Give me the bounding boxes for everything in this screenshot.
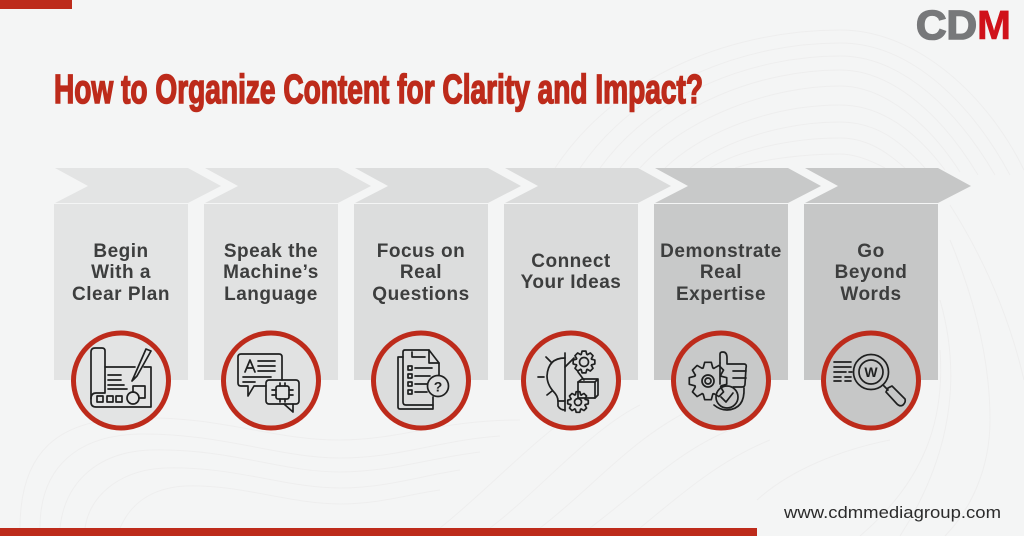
heading: step 6: Beyond: [835, 262, 907, 283]
heading: step 3: Focus on: [377, 241, 465, 262]
heading: step 1: Clear Plan: [72, 284, 170, 305]
bottom accent bar: [0, 528, 757, 536]
heading: step 6: Words: [840, 284, 902, 305]
panel: Connect Your Ideas: [504, 168, 671, 428]
icon: blueprint and pencil: [91, 348, 151, 407]
heading: step 5: Real: [700, 262, 742, 283]
icon: speech bubbles with chip: [238, 354, 299, 412]
icon: checklist document with question: [398, 350, 448, 409]
panel: Demonstrate Real Expertise: [654, 168, 821, 428]
panel: Begin With a Clear Plan: [54, 168, 221, 428]
top accent bar: [0, 0, 72, 9]
heading: step 6: Go: [857, 241, 885, 262]
heading: step 4: Connect: [531, 251, 611, 272]
heading: step 2: Language: [224, 284, 318, 305]
panel: Focus on Real Questions: [354, 168, 521, 428]
icon: gear, thumbs up and check: [689, 352, 746, 410]
icon: magnifier over text: W: [864, 364, 878, 380]
heading: step 2: Machine’s: [223, 262, 319, 283]
website url: www.cdmmediagroup.com: [783, 504, 1001, 522]
title: How to Organize Content for Clarity and Impact?: [54, 66, 703, 112]
heading: step 1: With a: [91, 262, 151, 283]
heading: step 5: Expertise: [676, 284, 766, 305]
logo: CDM: M: [977, 2, 1011, 48]
logo: CDM: CD: [916, 2, 977, 48]
icon: half bulb and gears: [538, 351, 598, 412]
heading: step 1: Begin: [93, 241, 149, 262]
panel: Speak the Machine's Language: [204, 168, 371, 428]
panel: Go Beyond Words: [804, 168, 971, 428]
icon: magnifier over text: [834, 354, 905, 406]
heading: step 2: Speak the: [224, 241, 318, 262]
heading: step 5: Demonstrate: [660, 241, 782, 262]
icon: checklist document with question: ?: [434, 378, 442, 394]
heading: step 4: Your Ideas: [521, 272, 621, 293]
heading: step 3: Questions: [372, 284, 470, 305]
heading: step 3: Real: [400, 262, 442, 283]
logo: CDM: [916, 2, 1011, 48]
